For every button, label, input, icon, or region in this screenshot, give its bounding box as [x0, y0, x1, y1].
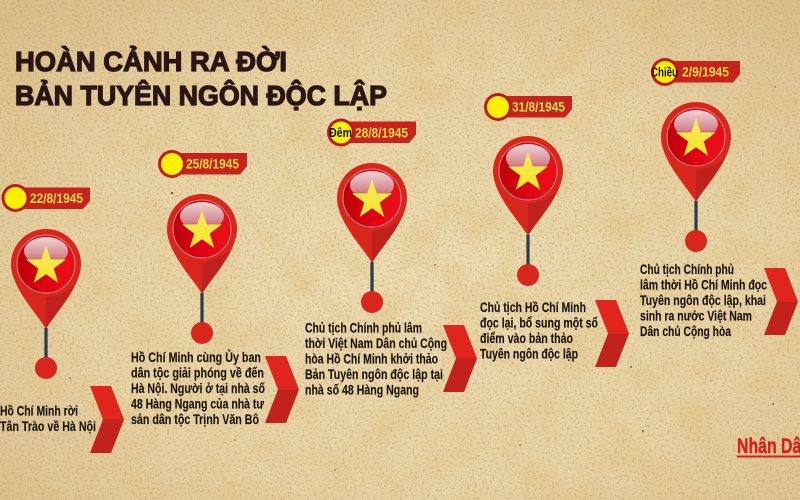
date badge 5: 2/9/1945 — [682, 64, 729, 80]
map pin 5 — [661, 102, 731, 252]
panel: step 4, 31/8/1945 — [480, 93, 629, 367]
date badge 3: 28/8/1945 — [355, 126, 408, 140]
arrow 1 — [90, 386, 124, 453]
title: HOÀN CẢNH RA ĐỜI — [15, 45, 287, 77]
date badge 2 — [158, 150, 247, 178]
description 2 — [131, 348, 265, 427]
description 5 — [640, 262, 767, 339]
description 2: 48 Hàng Ngang của nhà tư — [131, 396, 264, 412]
description 5: Tuyên ngôn độc lập, khai — [640, 293, 766, 308]
description 4: Tuyên ngôn độc lập — [480, 346, 578, 362]
description 2: Hà Nội. Người ở tại nhà số — [131, 381, 265, 396]
arrow 4 — [595, 300, 629, 367]
date badge 1: 22/8/1945 — [30, 191, 83, 206]
map pin 1 — [11, 229, 81, 379]
date badge 5: Chiều — [651, 66, 678, 80]
description 4: Chủ tịch Hồ Chí Minh — [480, 300, 586, 315]
description 3: hòa Hồ Chí Minh khởi thảo — [305, 352, 438, 366]
description 4: điểm vào bản thảo — [480, 331, 573, 346]
description 5: Chủ tịch Chính phủ — [640, 262, 734, 277]
date badge 3 — [327, 118, 416, 146]
date badge 4 — [484, 93, 572, 121]
map pin 4 — [493, 136, 563, 286]
date badge 1 — [2, 184, 90, 212]
arrow 3 — [443, 325, 477, 392]
description 5: sinh ra nước Việt Nam — [640, 308, 752, 324]
date badge 2: 25/8/1945 — [186, 156, 239, 172]
description 4: đọc lại, bổ sung một số — [480, 316, 598, 330]
description 2: dân tộc giải phóng về đến — [131, 366, 264, 380]
arrow 5 — [764, 268, 798, 335]
panel: step 1, 22/8/1945 — [0, 184, 124, 453]
description 3 — [305, 320, 447, 398]
panel: step 3, Đêm 28/8/1945 — [305, 118, 477, 398]
description 3: Chủ tịch Chính phủ lâm — [305, 320, 422, 336]
panel: step 5, Chiều 2/9/1945 — [640, 58, 798, 339]
map pin 2 — [167, 194, 237, 344]
description 4 — [480, 300, 598, 362]
date badge 4: 31/8/1945 — [512, 100, 565, 114]
description 1 — [0, 404, 96, 434]
arrow 2 — [265, 356, 299, 423]
panel: step 2, 25/8/1945 — [131, 150, 299, 427]
date badge 5 — [651, 58, 740, 86]
title — [15, 45, 387, 111]
description 3: nhà số 48 Hàng Ngang — [305, 382, 419, 398]
description 3: Bản Tuyên ngôn độc lập tại — [305, 367, 443, 382]
map pin 3 — [337, 163, 407, 313]
description 2: Hồ Chí Minh cùng Ủy ban — [131, 348, 261, 365]
description 1: Hồ Chí Minh rời — [0, 404, 78, 418]
description 2: sản dân tộc Trịnh Văn Bô — [131, 412, 259, 427]
title: BẢN TUYÊN NGÔN ĐỘC LẬP — [15, 79, 387, 111]
description 1: Tân Trào về Hà Nội — [0, 419, 96, 434]
description 5: Dân chủ Cộng hòa — [640, 324, 731, 339]
date badge 3: Đêm — [329, 126, 352, 140]
description 3: thời Việt Nam Dân chủ Cộng — [305, 336, 447, 351]
